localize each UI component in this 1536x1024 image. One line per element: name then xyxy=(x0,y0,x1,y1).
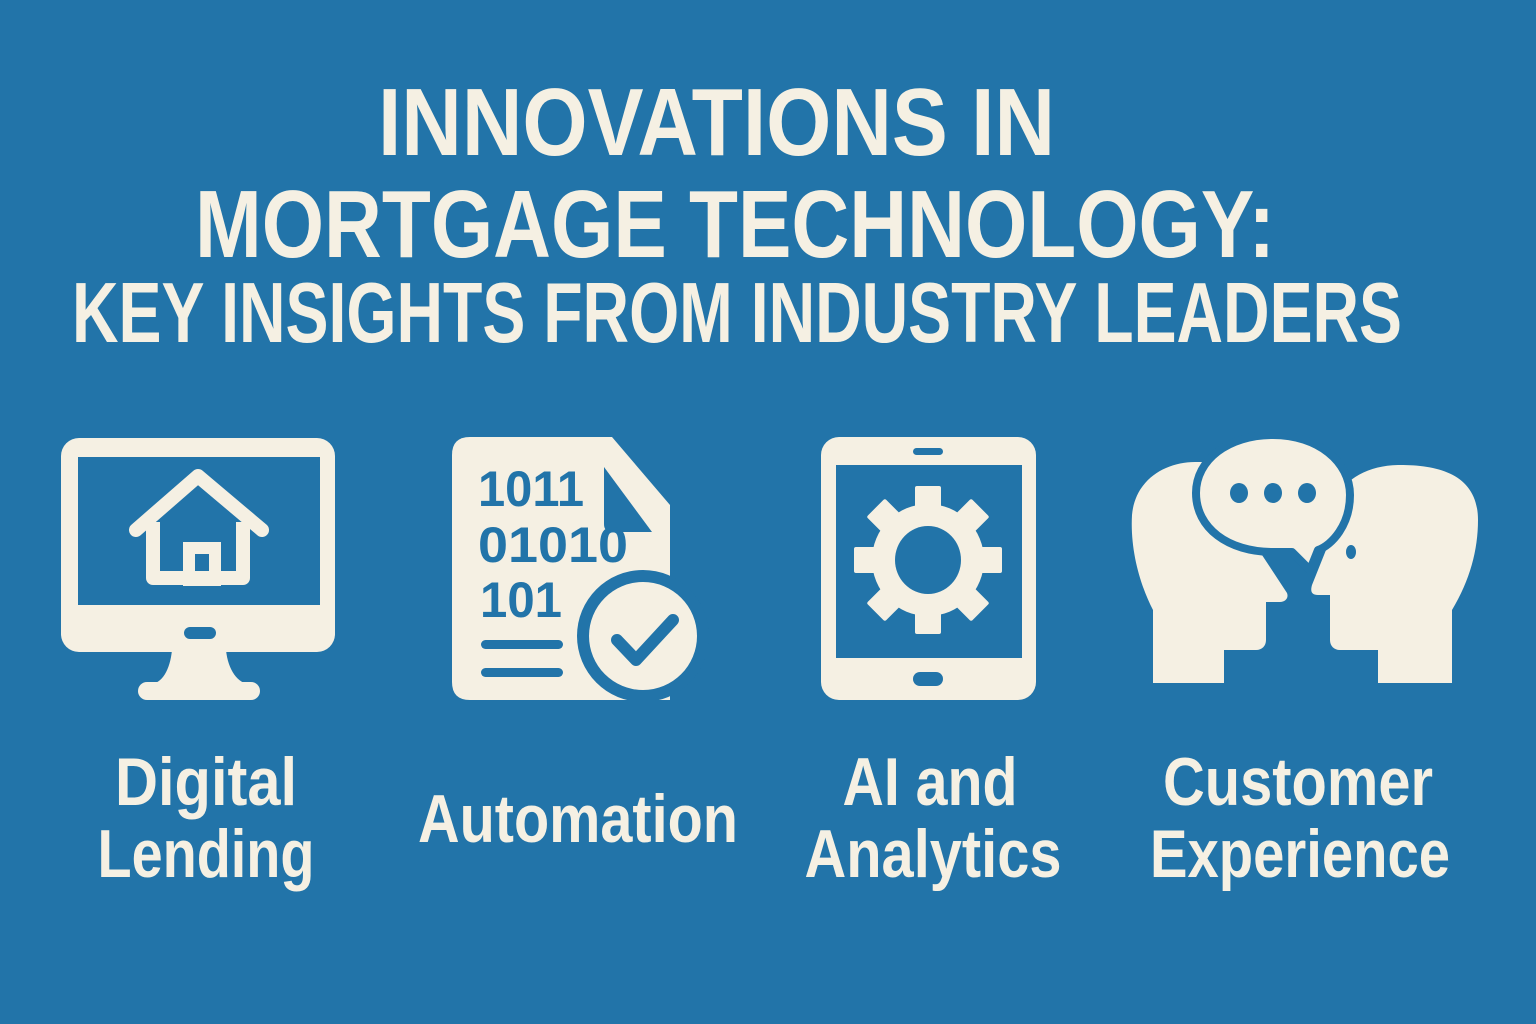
label: Digital Lending: Digital xyxy=(115,744,297,820)
title xyxy=(72,69,1402,361)
title: INNOVATIONS IN xyxy=(378,69,1055,176)
label: Automation: Automation xyxy=(418,781,738,857)
icon: two heads with speech bubble xyxy=(1132,435,1478,683)
icon: tablet with gear xyxy=(821,437,1036,700)
label: Customer Experience: Experience xyxy=(1150,816,1450,892)
label: AI and Analytics: AI and xyxy=(842,744,1018,820)
label: Digital Lending xyxy=(98,744,314,892)
label: AI and Analytics: Analytics xyxy=(804,816,1062,892)
label: AI and Analytics xyxy=(804,744,1062,892)
icon: document with binary and check: 01010 xyxy=(478,517,628,573)
icon: monitor with house xyxy=(61,438,335,700)
icon: document with binary and check xyxy=(452,437,709,702)
label: Customer Experience: Customer xyxy=(1163,744,1433,820)
icon: document with binary and check: 1011 xyxy=(478,461,584,517)
label: Customer Experience xyxy=(1150,744,1450,892)
icon: document with binary and check: 101 xyxy=(480,572,562,628)
title: MORTGAGE TECHNOLOGY: xyxy=(195,171,1275,278)
label: Digital Lending: Lending xyxy=(98,816,314,892)
